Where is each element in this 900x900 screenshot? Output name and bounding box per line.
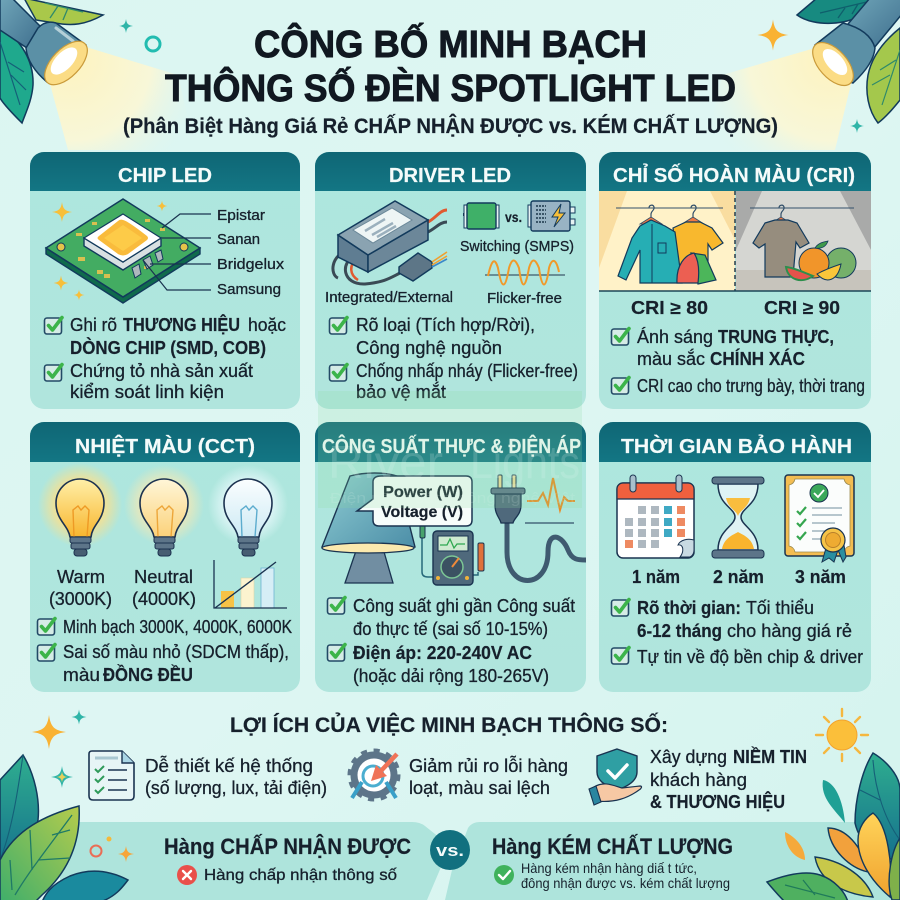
benefit: trust: NIỀM TIN (733, 746, 807, 767)
checklist: CRI: CRI cao cho trưng bày, thời trang (637, 376, 865, 396)
checklist: CRI: Ánh sáng (637, 327, 713, 347)
chip brand labels: Samsung (217, 281, 281, 298)
note: poor: đông nhận được vs. kém chất lượng (521, 875, 730, 891)
labels: warranty years: 1 năm (632, 567, 680, 587)
checklist: chip LED: Ghi rõ (70, 315, 117, 335)
chip brand labels: Epistar (217, 207, 265, 224)
sparkles bottom-left (32, 710, 134, 862)
checklist: warranty: 6-12 tháng (637, 621, 722, 641)
title (165, 21, 736, 110)
icon: cool bulb (208, 465, 288, 556)
checklist: CRI: màu sắc (637, 348, 705, 369)
ring top-left (146, 37, 160, 51)
icon: plug and cord (491, 475, 586, 580)
benefit: design (89, 751, 327, 800)
label: neutral (132, 567, 196, 609)
checklist: chip LED: hoặc (248, 315, 286, 335)
icon: hourglass (712, 477, 764, 558)
checklist: CCT: ĐỒNG ĐỀU (103, 664, 193, 685)
top-left corner leaves (0, 0, 103, 123)
checklist: driver LED (330, 315, 578, 402)
benefit: trust: khách hàng (650, 770, 747, 790)
checklist: chip LED (44, 314, 286, 402)
label: warm (49, 567, 112, 609)
icon: LED driver box (333, 201, 447, 284)
band: poor goods (445, 822, 900, 900)
label: CRI 90: CRI ≥ 90 (764, 298, 840, 318)
badge: vs (430, 830, 470, 870)
checklist: CRI: CHÍNH XÁC (710, 348, 805, 369)
panel: warranty (599, 422, 871, 692)
benefit: trust (589, 746, 807, 812)
panel: driver LED (315, 152, 586, 409)
labels: warranty years: 2 năm (713, 567, 764, 587)
chip brand labels (143, 207, 285, 298)
icon: switching components: vs. (505, 209, 522, 225)
label: switching: Switching (SMPS) (460, 239, 574, 255)
heading: driver LED: DRIVER LED (389, 165, 511, 187)
icon: calendar (617, 475, 694, 558)
panel: chip LED (30, 152, 300, 409)
band: acceptable goods (60, 822, 450, 900)
icon: certificate (785, 475, 854, 562)
label: CRI 80: CRI ≥ 80 (631, 298, 708, 318)
label: integrated/external: Integrated/External (325, 290, 453, 306)
checklist: driver LED: Công nghệ nguồn (356, 338, 502, 358)
benefit: design: Dễ thiết kế hệ thống (145, 755, 313, 776)
label: warm: (3000K) (49, 589, 112, 609)
watermark: River Lights: Điện năng sáng công nghệ Việt (330, 490, 576, 507)
watermark: River Lights: Lights (470, 436, 580, 488)
icon: sun (816, 709, 868, 761)
checklist: power and voltage: đo thực tế (sai số 10-15%) (353, 619, 548, 639)
checklist: chip LED: THƯƠNG HIỆU (123, 314, 240, 335)
benefit: reduce risk (350, 751, 568, 799)
icon: pulse wave (527, 478, 575, 510)
title: CÔNG BỐ MINH BẠCH (254, 21, 647, 66)
light beam left (50, 47, 195, 150)
checklist: warranty: Tự tin về độ bền chip & driver (637, 647, 863, 667)
label: neutral: Neutral (134, 567, 193, 587)
title: THÔNG SỐ ĐÈN SPOTLIGHT LED (165, 65, 736, 110)
icon: cross (177, 865, 197, 885)
divider and rule (734, 191, 736, 291)
heading: power and voltage: CÔNG SUẤT THỰC & ĐIỆN ÁP (322, 434, 581, 458)
checklist: warranty: Tối thiểu (746, 598, 814, 618)
sparkle teal top-left (119, 19, 133, 33)
callout: power and voltage: Power (W) (383, 484, 463, 501)
checklist: CCT: màu (63, 665, 100, 685)
heading: warranty: THỜI GIAN BẢO HÀNH (621, 434, 852, 458)
note: poor (521, 860, 730, 891)
icon: multimeter (420, 523, 484, 585)
labels: warranty years: 3 năm (795, 567, 846, 587)
benefit: design: (số lượng, lux, tải điện) (145, 778, 327, 798)
chip brand labels: Bridgelux (217, 256, 285, 273)
callout: power and voltage (357, 476, 472, 526)
label: neutral: (4000K) (132, 589, 196, 609)
badge: vs: vs. (436, 841, 464, 860)
sparkle orange top-right (758, 20, 788, 50)
callout: power and voltage: Voltage (V) (381, 504, 463, 521)
chip brand labels: Sanan (217, 231, 260, 248)
icon: LED chip on PCB (46, 199, 200, 303)
benefit: reduce risk: loạt, màu sai lệch (409, 778, 550, 798)
checklist: power and voltage: Điện áp: 220-240V AC (353, 643, 532, 663)
sparkle teal right (850, 119, 864, 133)
chart: color temperature bars (214, 560, 287, 608)
checklist: driver LED: Rõ loại (Tích hợp/Rời), (356, 315, 535, 335)
note: poor: Hàng kém nhận hàng diấ t tức, (521, 860, 697, 876)
icon: spotlight top-right (805, 0, 900, 93)
icon: shield in hand (589, 749, 642, 805)
icon: check (494, 865, 514, 885)
checklist: warranty: cho hàng giá rẻ (727, 621, 852, 641)
heading: chip LED: CHIP LED (118, 165, 212, 187)
bottom-left leaves (0, 755, 128, 900)
light beam right (705, 48, 851, 150)
label: warm: Warm (57, 567, 105, 587)
panel: CRI (599, 152, 871, 409)
icon: spotlight top-left (0, 0, 95, 92)
benefit: trust: & THƯƠNG HIỆU (650, 791, 785, 812)
labels: warranty years (632, 567, 846, 587)
watermark: River Lights: River (328, 436, 443, 488)
checklist: warranty (612, 598, 863, 667)
checklist: driver LED: Chống nhấp nháy (Flicker-free) (356, 361, 578, 381)
panel: power and voltage (315, 422, 586, 692)
heading: CRI: CHỈ SỐ HOÀN MÀU (CRI) (613, 163, 855, 187)
checklist: power and voltage (328, 596, 575, 686)
checklist: chip LED: Chứng tỏ nhà sản xuất (70, 361, 253, 381)
heading: poor: Hàng KÉM CHẤT LƯỢNG (492, 834, 733, 859)
scene: warm clothes (599, 191, 735, 291)
checklist: power and voltage: Công suất ghi gần Công suất (353, 596, 575, 616)
note: acceptable: Hàng chấp nhận thông số (204, 867, 397, 884)
icon: checklist document (89, 751, 134, 800)
scene: neutral clothes and fruit (736, 191, 871, 291)
subtitle: (Phân Biệt Hàng Giá Rẻ CHẤP NHẬN ĐƯỢC vs. KÉM CHẤT LƯỢNG) (123, 114, 778, 138)
checklist: CRI (612, 327, 865, 396)
bottom-right leaves (767, 753, 900, 900)
top-right corner leaves (797, 0, 900, 123)
checklist: CCT: Sai số màu nhỏ (SDCM thấp), (63, 642, 289, 662)
checklist: chip LED: kiểm soát linh kiện (70, 382, 224, 402)
icon: neutral bulb (124, 465, 204, 556)
checklist: CCT (38, 617, 292, 685)
icon: switching components (463, 201, 575, 231)
icon: gear target (350, 751, 398, 799)
label: flicker-free: Flicker-free (487, 291, 562, 307)
checklist: driver LED: bảo vệ mắt (356, 381, 446, 402)
heading: acceptable: Hàng CHẤP NHẬN ĐƯỢC (164, 834, 411, 859)
benefit: trust: Xây dựng (650, 747, 727, 767)
heading: CCT: NHIỆT MÀU (CCT) (75, 434, 255, 458)
checklist: CCT: Minh bạch 3000K, 4000K, 6000K (63, 617, 292, 637)
heading: benefits: LỢI ÍCH CỦA VIỆC MINH BẠCH THÔNG SỐ: (230, 713, 668, 737)
icon: warm bulb (38, 463, 122, 556)
checklist: power and voltage: (hoặc dải rộng 180-265V) (353, 666, 549, 686)
checklist: warranty: Rõ thời gian: (637, 598, 741, 618)
icon: lamp (322, 473, 415, 583)
baseline under pulse wave (525, 522, 574, 524)
checklist: CRI: TRUNG THỰC, (718, 327, 834, 347)
panel: CCT (30, 422, 300, 692)
watermark: River Lights (318, 391, 582, 508)
checklist: chip LED: DÒNG CHIP (SMD, COB) (70, 337, 266, 358)
benefit: reduce risk: Giảm rủi ro lỗi hàng (409, 755, 568, 776)
icon: flicker-free wave (485, 260, 565, 284)
